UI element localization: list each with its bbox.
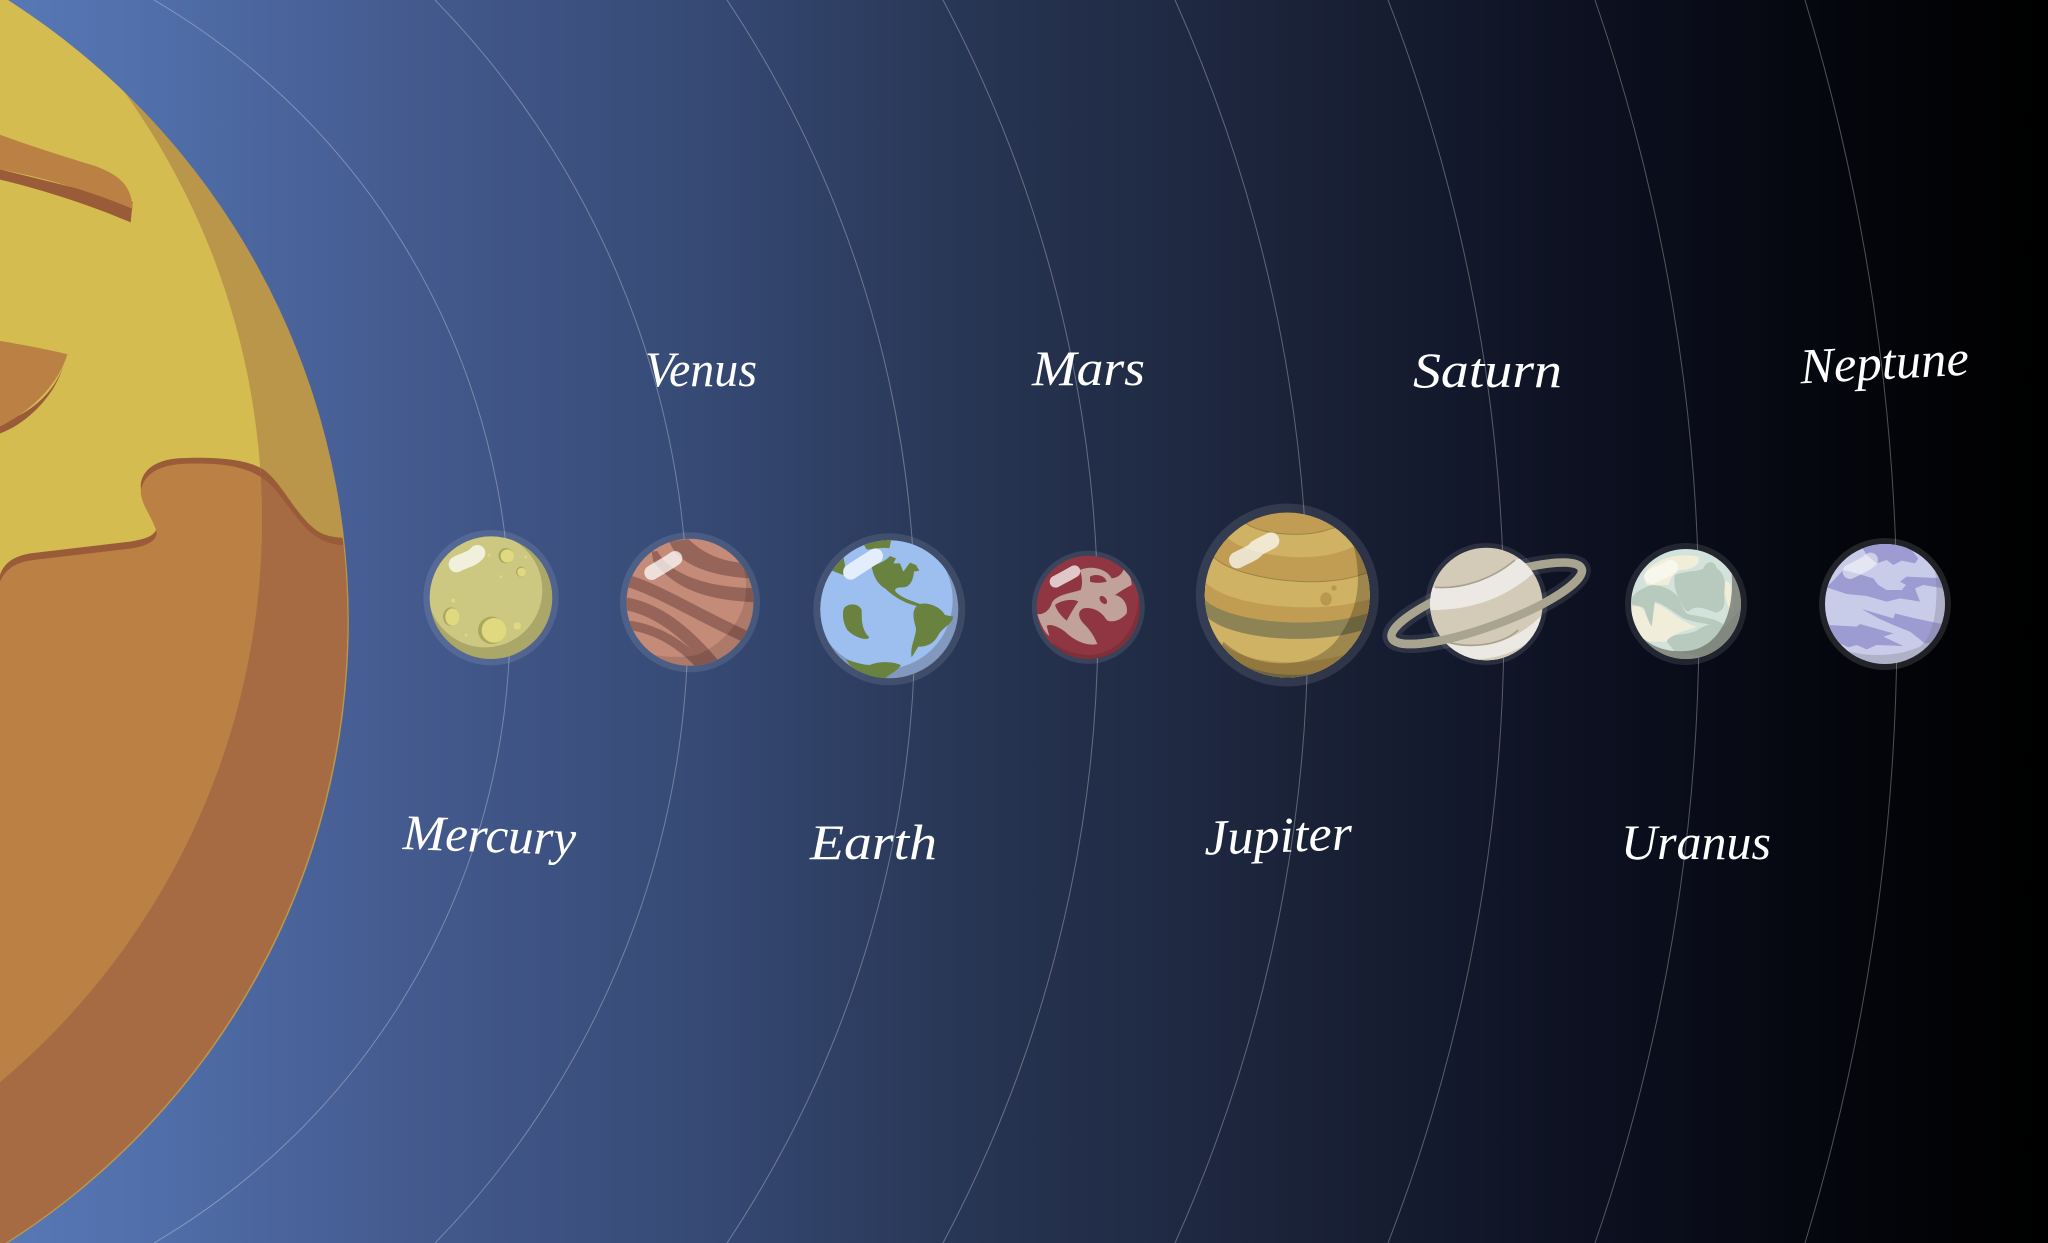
planet: Mars	[1030, 550, 1147, 665]
label: Uranus: Uranus	[1621, 814, 1771, 870]
label: Neptune: Neptune	[1797, 330, 1970, 394]
label: Jupiter: Jupiter	[1203, 804, 1353, 866]
label: Saturn: Saturn	[1413, 342, 1562, 398]
ring back	[1384, 547, 1589, 659]
planet: Jupiter	[1196, 504, 1383, 693]
sun	[0, 0, 353, 1243]
planet: Venus	[620, 532, 760, 672]
planet: Uranus	[1625, 543, 1747, 667]
planet: Saturn	[1384, 543, 1589, 667]
planet: Neptune	[1819, 538, 1951, 670]
planet: Earth	[813, 531, 965, 685]
ring front	[1392, 569, 1589, 659]
label: Mercury: Mercury	[401, 804, 578, 866]
label: Venus: Venus	[645, 341, 757, 397]
planet: Mercury	[423, 530, 559, 665]
label: Mars: Mars	[1031, 340, 1145, 396]
label: Earth: Earth	[809, 814, 937, 870]
